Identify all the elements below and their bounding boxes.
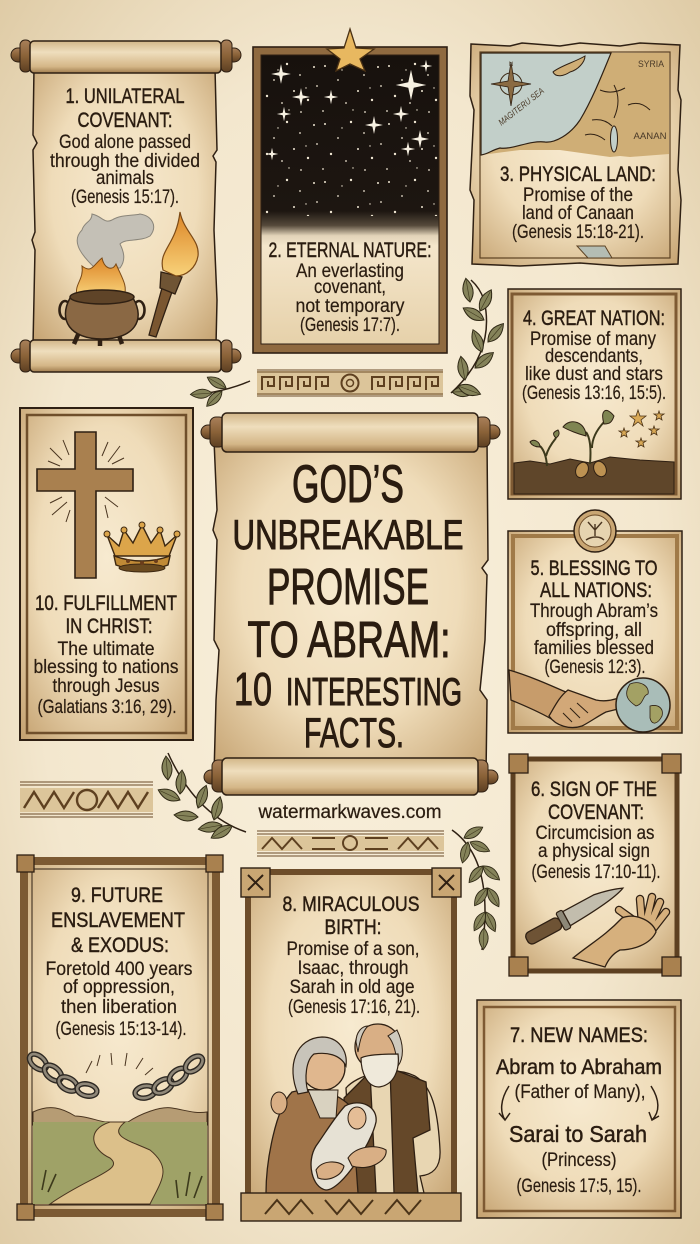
title: INTERESTING	[286, 671, 462, 714]
arrow: left	[499, 1086, 510, 1120]
icon: wooden cross	[37, 432, 133, 578]
text: fact 1: 1. UNILATERAL	[66, 85, 184, 108]
frame	[477, 1000, 681, 1218]
soil	[514, 457, 674, 494]
panel: 5 blessing to all nations	[508, 510, 682, 733]
icon: broken chain	[26, 1051, 206, 1100]
text: fact 4: descendants,	[545, 346, 643, 367]
text: fact 1: animals	[96, 168, 154, 189]
icon: laurel sprig lower left	[156, 753, 246, 842]
text: fact 9: of oppression,	[63, 977, 175, 998]
text: fact 7: Sarai to Sarah	[509, 1121, 647, 1147]
text: fact 6	[531, 778, 660, 883]
text: fact 7: Abram to Abraham	[496, 1056, 662, 1079]
map: MAGITERU SEA	[496, 86, 546, 128]
map	[481, 53, 669, 157]
corner ornaments	[241, 868, 461, 897]
icon: small stars	[619, 410, 664, 447]
title: TO ABRAM:	[248, 611, 450, 668]
text: fact 1: (Genesis 15:17).	[71, 187, 179, 208]
frame	[248, 872, 454, 1212]
text: fact 1: through the divided	[50, 151, 200, 172]
frame	[24, 861, 216, 1213]
top roller	[11, 40, 241, 73]
illustration: elderly couple with baby	[266, 1024, 440, 1193]
panel: 9 future enslavement and exodus	[17, 855, 223, 1220]
icon: crown	[104, 522, 180, 572]
text: fact 2: covenant,	[314, 277, 386, 298]
text: fact 7: (Father of Many),	[514, 1082, 646, 1103]
bottom band	[241, 1193, 461, 1221]
text: fact 1: God alone passed	[59, 132, 191, 153]
frame	[20, 408, 193, 740]
text: fact 9: (Genesis 15:13-14).	[56, 1019, 186, 1040]
decorative band: greek key	[257, 370, 443, 396]
illustration: landscape with path	[33, 1108, 207, 1204]
panel: 4 great nation	[508, 289, 681, 499]
text: fact 2: (Genesis 17:7).	[300, 315, 400, 336]
corner ornaments	[509, 754, 681, 976]
map fragment	[577, 246, 612, 258]
text: fact 9: then liberation	[61, 997, 177, 1018]
text: fact 5	[530, 557, 658, 678]
panel: 8 miraculous birth	[241, 868, 461, 1221]
icon: knife	[522, 879, 628, 949]
icon: torch	[149, 212, 198, 337]
icon: laurel sprig right	[451, 277, 507, 399]
title: GOD’S	[292, 455, 404, 514]
text: fact 6: 6. SIGN OF THE	[531, 778, 657, 801]
text: fact 3: (Genesis 15:18-21).	[512, 222, 644, 243]
text: fact 8: (Genesis 17:16, 21).	[288, 997, 420, 1018]
baby	[311, 1103, 376, 1190]
starry sky	[261, 55, 439, 344]
text: fact 8: Isaac, through	[298, 958, 408, 979]
icon: handshake	[509, 670, 622, 728]
star field	[262, 56, 438, 216]
island	[553, 56, 585, 76]
bottom roller	[11, 340, 241, 372]
inner border	[480, 52, 670, 258]
text: fact 1: COVENANT:	[78, 109, 172, 132]
text: fact 1	[50, 85, 200, 208]
text: fact 2: 2. ETERNAL NATURE:	[268, 239, 432, 262]
text: fact 10: through Jesus	[52, 676, 160, 697]
top roller	[201, 413, 500, 452]
text: fact 5: 5. BLESSING TO	[530, 557, 658, 580]
text: fact 3	[500, 163, 656, 243]
text: fact 7: (Genesis 17:5, 15).	[516, 1176, 642, 1197]
icon: rays	[48, 440, 124, 522]
icon: cauldron	[60, 290, 144, 346]
compass	[491, 62, 531, 106]
text: fact 9: ENSLAVEMENT	[51, 909, 185, 932]
text: fact 2	[268, 239, 432, 336]
text: fact 4: like dust and stars	[525, 364, 663, 385]
text: fact 3: land of Canaan	[522, 203, 634, 224]
text: fact 2: An everlasting	[296, 261, 404, 282]
panel: 1 unilateral covenant scroll	[11, 40, 241, 372]
frame	[508, 531, 682, 733]
text: fact 8	[282, 893, 420, 1018]
text: fact 10: The ultimate	[58, 639, 154, 660]
text: fact 5: ALL NATIONS:	[540, 579, 652, 602]
text: fact 4	[522, 307, 666, 404]
torn parchment	[470, 43, 681, 266]
text: fact 5: (Genesis 12:3).	[544, 657, 646, 678]
text: fact 6: COVENANT:	[548, 801, 644, 824]
panel: 10 fulfillment in Christ	[20, 408, 193, 740]
decorative band: lower knotwork	[257, 831, 444, 856]
man	[344, 1024, 440, 1193]
text: fact 6: (Genesis 17:10-11).	[532, 862, 660, 883]
arrow: right	[649, 1086, 659, 1120]
map land detail	[585, 85, 650, 140]
panel: 7 new names	[477, 1000, 681, 1218]
text: fact 7: (Princess)	[542, 1150, 616, 1171]
icon: cauldron fire	[76, 258, 125, 296]
scroll body	[32, 68, 217, 345]
icon: open hand	[573, 897, 666, 967]
map labels: SYRIA	[638, 59, 664, 69]
icon: gold star	[327, 29, 374, 71]
man's hand on shoulder	[271, 1092, 287, 1114]
text: fact 10	[34, 592, 178, 718]
scroll body	[213, 440, 488, 775]
panel: 6 sign of the covenant	[509, 754, 681, 976]
text: fact 8: 8. MIRACULOUS	[282, 893, 420, 916]
title: PROMISE	[267, 558, 429, 615]
text: fact 5: Through Abram’s	[530, 601, 658, 622]
panel: 2 eternal nature	[253, 29, 447, 353]
text: fact 8: Promise of a son,	[286, 939, 420, 960]
text: fact 7	[496, 1024, 662, 1197]
text: fact 3: 3. PHYSICAL LAND:	[500, 163, 656, 186]
icon: globe	[616, 678, 670, 732]
text: fact 10: IN CHRIST:	[66, 615, 152, 638]
panel: 3 physical land	[470, 43, 681, 266]
woman	[266, 1037, 358, 1193]
text: fact 3: Promise of the	[523, 185, 633, 206]
text: fact 10: (Galatians 3:16, 29).	[38, 697, 176, 718]
text: fact 10: blessing to nations	[34, 657, 178, 678]
icon: laurel sprig lower right	[452, 823, 503, 950]
text: fact 8: BIRTH:	[324, 916, 382, 939]
text: fact 9	[46, 884, 192, 1040]
text: fact 6: a physical sign	[538, 841, 650, 862]
text: fact 9: & EXODUS:	[71, 934, 169, 957]
text: fact 4: Promise of many	[530, 329, 656, 350]
title	[232, 455, 464, 756]
title: UNBREAKABLE	[232, 511, 464, 558]
text: fact 9: 9. FUTURE	[71, 884, 163, 907]
text: fact 5: offspring, all	[546, 620, 642, 641]
title: FACTS.	[304, 709, 404, 756]
panel: central title scroll	[201, 413, 500, 795]
text: fact 9: Foretold 400 years	[46, 959, 192, 980]
bottom roller	[204, 758, 498, 795]
title: 10	[234, 663, 272, 715]
text: fact 7: 7. NEW NAMES:	[510, 1024, 648, 1047]
frame	[508, 289, 681, 499]
text: fact 5: families blessed	[534, 638, 654, 659]
decorative band: left knotwork	[20, 782, 153, 817]
corner blocks	[17, 855, 223, 1220]
text: fact 8: Sarah in old age	[290, 977, 414, 998]
text: fact 6: Circumcision as	[536, 823, 654, 844]
icon: medallion	[574, 510, 616, 552]
map: AANAN	[634, 131, 666, 141]
frame	[513, 759, 677, 971]
text: fact 2: not temporary	[296, 296, 405, 317]
wood frame	[253, 47, 447, 353]
icon: smoke	[77, 214, 154, 268]
hands	[316, 1147, 386, 1179]
icon: laurel sprig small	[190, 373, 250, 409]
icon: sprouts	[530, 410, 614, 480]
compass: N	[509, 62, 513, 68]
watermark text: watermarkwaves.com	[258, 802, 442, 823]
text: fact 10: 10. FULFILLMENT	[35, 592, 177, 615]
